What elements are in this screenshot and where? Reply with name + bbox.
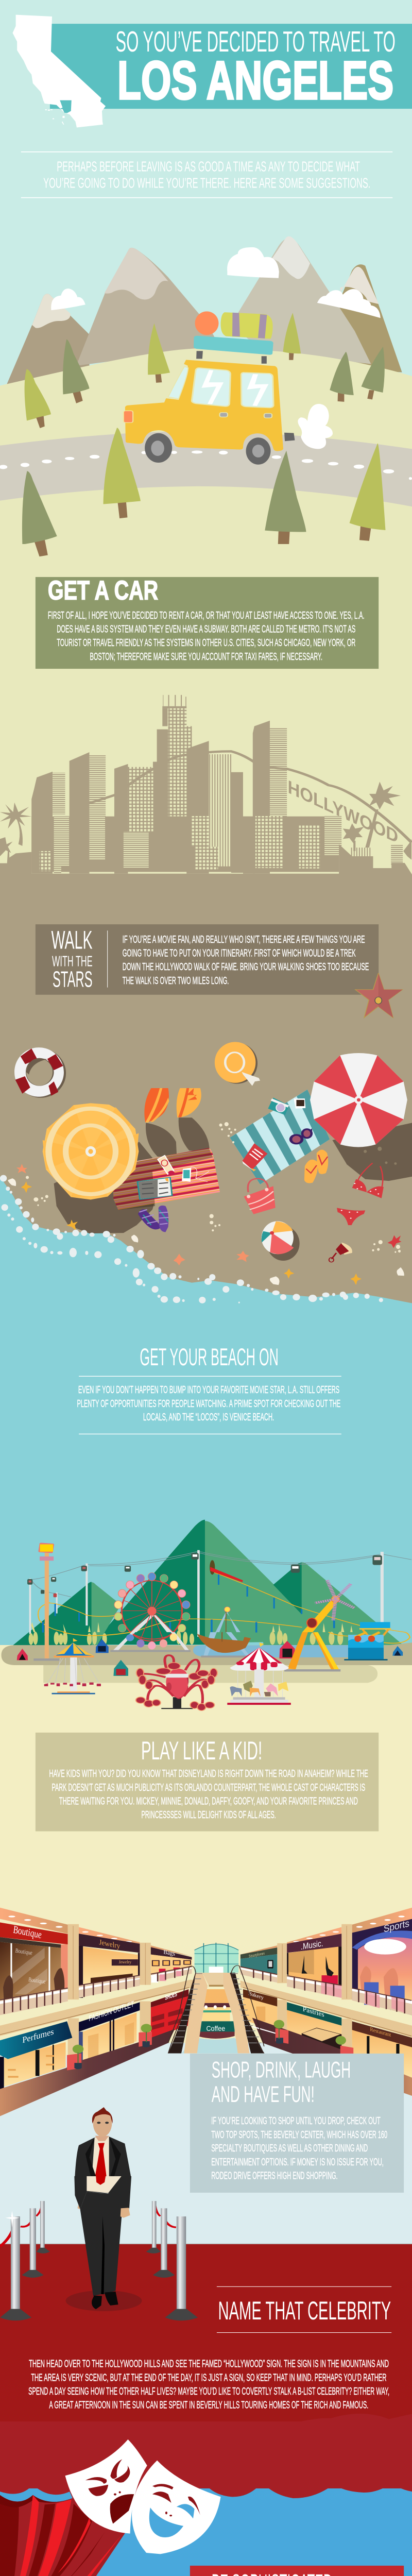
octopus ride [136, 1655, 217, 1710]
lower left shops: SHOES [165, 1991, 177, 2002]
intro rule bottom [21, 197, 392, 198]
sign: coffee: Coffee [207, 2024, 225, 2032]
jewelry shop [79, 1934, 140, 1953]
ground skyline [0, 844, 412, 879]
man lower body [66, 2176, 142, 2311]
windows [192, 368, 230, 406]
sand dots [26, 1122, 401, 1253]
heading: get a car: GET A CAR [48, 576, 158, 605]
starfish and shells [8, 1164, 404, 1285]
exhaust [284, 433, 295, 441]
curtain drape [0, 2495, 126, 2576]
music shop [287, 1934, 341, 1953]
hollywood hill line [71, 751, 411, 842]
coaster train [210, 1560, 243, 1582]
section: walk with the stars: WITH THE [52, 953, 93, 970]
hill [0, 348, 412, 544]
mountains [7, 236, 402, 385]
section: walk with the stars: STARS [53, 967, 93, 992]
icon: tragedy mask [65, 2439, 147, 2534]
carousel [227, 1642, 291, 1705]
palms [0, 782, 411, 872]
sports shop [352, 1919, 412, 2015]
umbrella shadow yellow [54, 1142, 158, 1233]
shoes shop [151, 1989, 188, 2007]
rope posts left [0, 2201, 50, 2320]
red book [242, 1143, 267, 1172]
body [125, 360, 283, 451]
ride: blue tower top [359, 1622, 391, 1641]
text: walk with the stars: THE WALK IS OVER TWO MILES LONG. [123, 975, 229, 987]
park ground [2, 1642, 412, 1683]
tall tower [163, 695, 186, 706]
bags shop [151, 1947, 192, 1960]
red umbrella [310, 1053, 407, 1147]
left upper floor: Boutique [28, 1976, 45, 1985]
bucket [329, 1243, 352, 1262]
perfumes shop [4, 2042, 66, 2087]
exhaust smoke [298, 404, 333, 449]
panel: shop, drink, laugh [190, 2054, 404, 2193]
columns [277, 1924, 352, 1999]
sign: Music: .Music. [301, 1938, 323, 1952]
left towers [31, 772, 53, 874]
water [0, 1177, 412, 1366]
section: beach [0, 1053, 412, 1370]
curtain valance [0, 2447, 412, 2500]
text: beach [77, 1384, 340, 1423]
towel: pink stripes [113, 1148, 220, 1210]
section: header [12, 15, 412, 198]
shadow: red umbrella [332, 1123, 412, 1181]
planters [67, 2024, 152, 2071]
surfboards [144, 1088, 210, 1158]
boutique shop [0, 1922, 68, 1944]
ferris wheel bottom [110, 1632, 191, 1652]
intro text [43, 159, 370, 191]
sign: Jewelry: Jewelry [99, 1938, 120, 1951]
curtain valance top [0, 2414, 412, 2448]
sea foam [0, 1175, 383, 1303]
lower city masses [31, 817, 339, 872]
door handles [220, 413, 228, 417]
sign: perfumes: Perfumes [22, 2026, 54, 2045]
left upper floor: Boutique [15, 1947, 32, 1957]
pirate ship [197, 1632, 251, 1657]
lower left shops [0, 1989, 188, 2116]
lower left shops: FASHION OUTLET [89, 1999, 134, 2023]
ride: windmill [302, 1580, 355, 1632]
music player [182, 1167, 209, 1182]
text: walk with the stars [123, 934, 369, 987]
trees in front [22, 428, 385, 556]
railing left [0, 1967, 192, 2015]
trees [29, 1630, 343, 1645]
man upper body [75, 2107, 131, 2176]
mall floor [0, 2043, 412, 2176]
section: theatre [0, 2439, 412, 2576]
flip flops yellow [304, 1150, 328, 1183]
cableway [27, 1550, 411, 1637]
illustration: mountain road with car [0, 236, 412, 556]
intro rule top [21, 151, 392, 152]
car [124, 311, 333, 465]
ride: ferris wheel [114, 1572, 190, 1641]
section: get your beach on and park [13, 1376, 411, 1645]
perfumes awning [0, 2021, 72, 2059]
central towers [186, 741, 209, 874]
panel: get a car [36, 577, 379, 669]
beach ball [262, 1221, 300, 1261]
sign: pastries: Pastries [303, 2005, 324, 2019]
sign: restaurant: Restaurant [370, 2026, 391, 2038]
central atrium and escalators [168, 1965, 264, 2054]
panel: play like a kid [36, 1733, 379, 1832]
text: name that celebrity [28, 2358, 389, 2411]
heading: walk with the stars [51, 925, 93, 992]
section: red carpet [0, 2176, 412, 2448]
tower base [33, 1632, 59, 1661]
headlight [124, 411, 133, 422]
columns [68, 1924, 151, 1999]
right upper floor [241, 1908, 412, 2015]
ride: pirate ship frame [215, 1607, 241, 1632]
wheels [145, 433, 172, 463]
icon: beach hat [215, 1042, 260, 1086]
beach bag [244, 1179, 276, 1214]
right upper floor: Smartphones [249, 1951, 265, 1959]
swing ride [44, 1638, 101, 1694]
left upper floor [0, 1908, 192, 2015]
lower right shops [243, 1989, 412, 2096]
yellow umbrella [43, 1103, 139, 1199]
text: shop, drink, laugh [211, 2115, 387, 2181]
phone [158, 1156, 175, 1175]
section: walk with the stars: WALK [51, 925, 93, 954]
icon: life ring [14, 1047, 66, 1098]
mountains green [13, 1520, 403, 1645]
road dashes [0, 450, 412, 480]
heading: shop, drink, laugh [212, 2057, 351, 2107]
section: shopping mall [0, 1908, 412, 2193]
panel: walk with the stars [36, 924, 379, 995]
bikini [337, 1163, 384, 1225]
section: get a car [0, 576, 412, 879]
water ride [344, 1632, 388, 1660]
swinging frame [284, 1632, 340, 1671]
title band [50, 24, 412, 109]
ride: tower [38, 1543, 54, 1636]
left upper floor: Jewelry [119, 1960, 131, 1964]
fashion outlet [79, 2002, 140, 2031]
rope posts right [146, 2201, 198, 2320]
clouds [51, 247, 381, 318]
coaster [63, 1632, 410, 1643]
section: theme park rides [2, 1630, 412, 1832]
city skyline with Hollywood sign [0, 695, 412, 879]
middle floor beam [0, 1979, 412, 2061]
icon: comedy mask [132, 2461, 221, 2554]
camera [268, 1098, 289, 1115]
tents [17, 1639, 403, 1676]
roof luggage [194, 311, 273, 364]
road [0, 431, 412, 506]
text: get a car [48, 610, 365, 663]
trees behind car [25, 313, 385, 428]
open book [136, 1177, 173, 1200]
text: play like a kid [49, 1768, 368, 1821]
floor edge left [0, 2029, 175, 2116]
towel: teal stripes [230, 1090, 330, 1184]
section: walk with the stars [14, 924, 403, 1098]
railing right [241, 1967, 412, 2015]
sunglasses [289, 1128, 313, 1144]
panel: be sophisticated [190, 2566, 404, 2576]
trees row [31, 1622, 353, 1632]
flip flops purple [138, 1206, 169, 1232]
sign: bakery: Bakery [248, 1990, 264, 2001]
rules around heading [217, 2286, 391, 2287]
map of California [12, 15, 106, 127]
smartphones shop [241, 1947, 277, 1959]
left upper floor: Boutique [13, 1923, 42, 1941]
coaster track [38, 1571, 405, 1632]
atrium window [195, 1943, 238, 1973]
sign: Bags: Bags [163, 1949, 175, 1957]
icon: hollywood star [355, 973, 403, 1018]
photos [294, 1098, 305, 1109]
